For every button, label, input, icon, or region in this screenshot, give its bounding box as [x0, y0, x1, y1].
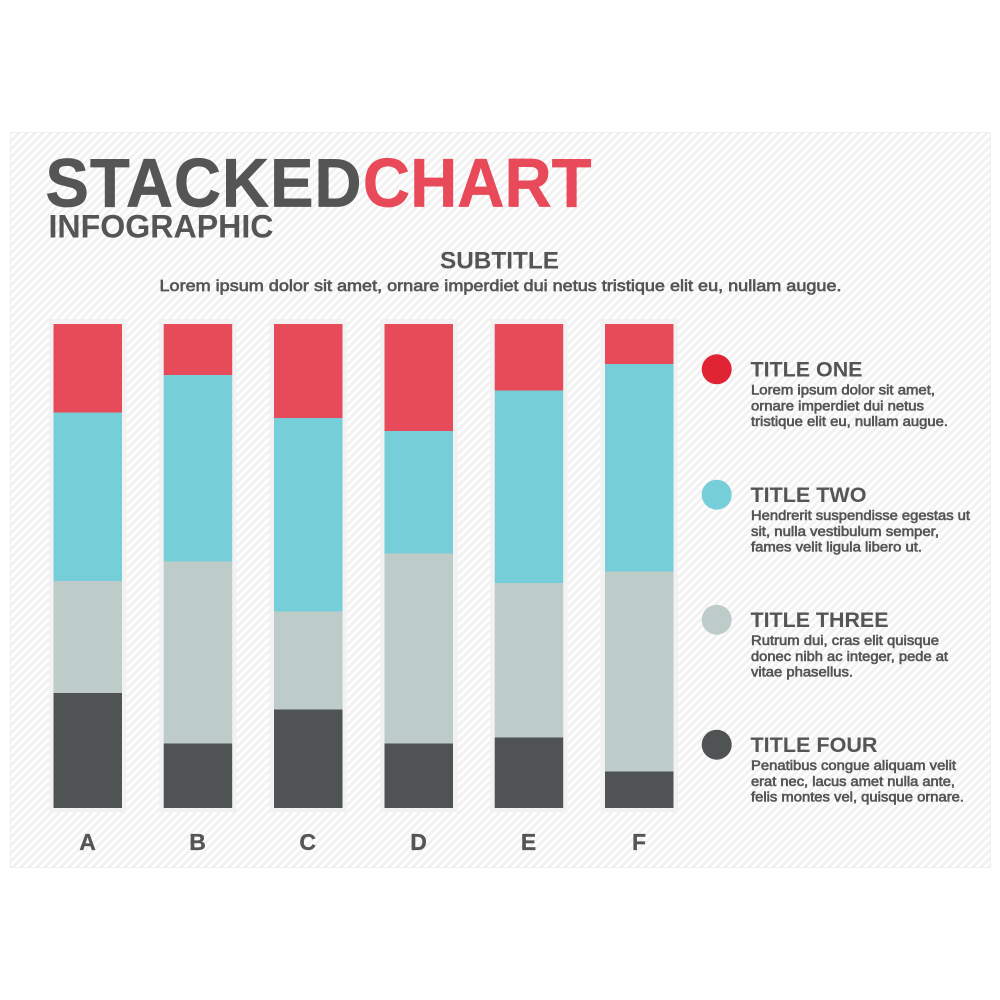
- title: [46, 146, 592, 222]
- legend: title one: [702, 354, 948, 429]
- bar F: [600, 319, 678, 812]
- legend: title three: [702, 605, 948, 680]
- bar C: [270, 319, 347, 812]
- axis labels: C: [299, 829, 316, 855]
- legend heading three: TITLE THREE: [750, 607, 888, 632]
- legend text four: erat nec, lacus amet nulla ante,: [751, 774, 955, 789]
- axis labels: D: [410, 829, 427, 855]
- icon: grey dot: [702, 605, 732, 635]
- background panel: [10, 132, 990, 868]
- legend text four: [751, 758, 964, 804]
- heading: infographic: INFOGRAPHIC: [48, 208, 274, 244]
- icon: dark dot: [702, 730, 732, 760]
- bar E: [490, 319, 568, 812]
- legend text two: sit, nulla vestibulum semper,: [751, 524, 939, 539]
- legend text one: ornare imperdiet dui netus: [751, 398, 924, 413]
- legend heading two: TITLE TWO: [750, 482, 866, 507]
- legend text one: [751, 382, 948, 429]
- axis labels: [79, 829, 646, 855]
- legend text two: Hendrerit suspendisse egestas ut: [751, 508, 970, 523]
- bar D: [380, 319, 458, 812]
- legend text three: Rutrum dui, cras elit quisque: [751, 633, 939, 648]
- legend text four: Penatibus congue aliquam velit: [751, 758, 956, 773]
- icon: teal dot: [702, 480, 732, 510]
- legend text three: vitae phasellus.: [751, 664, 853, 680]
- legend text three: [751, 633, 948, 680]
- icon: red dot: [702, 354, 732, 384]
- bar B: [159, 319, 236, 812]
- axis labels: A: [79, 829, 96, 855]
- axis labels: F: [632, 829, 646, 855]
- stacked bar chart: [49, 319, 678, 812]
- legend text two: fames velit ligula libero ut.: [751, 539, 922, 554]
- legend text one: tristique elit eu, nullam augue.: [751, 414, 948, 429]
- legend text three: donec nibh ac integer, pede at: [751, 649, 948, 664]
- legend heading four: TITLE FOUR: [750, 732, 878, 757]
- bar A: [49, 319, 126, 812]
- legend text four: felis montes vel, quisque ornare.: [751, 789, 964, 804]
- axis labels: E: [521, 829, 536, 855]
- legend text one: Lorem ipsum dolor sit amet,: [751, 382, 935, 398]
- subtitle: SUBTITLE: [440, 248, 559, 274]
- legend: title four: [702, 730, 964, 804]
- title: CHART: [363, 146, 592, 222]
- axis labels: B: [189, 829, 206, 855]
- legend text two: [751, 508, 970, 554]
- subtitle description: Lorem ipsum dolor sit amet, ornare imperdiet dui netus tristique elit eu, nullam augue.: [160, 278, 842, 295]
- legend heading one: TITLE ONE: [750, 356, 862, 382]
- title: STACKED: [46, 146, 362, 222]
- legend: title two: [702, 480, 970, 554]
